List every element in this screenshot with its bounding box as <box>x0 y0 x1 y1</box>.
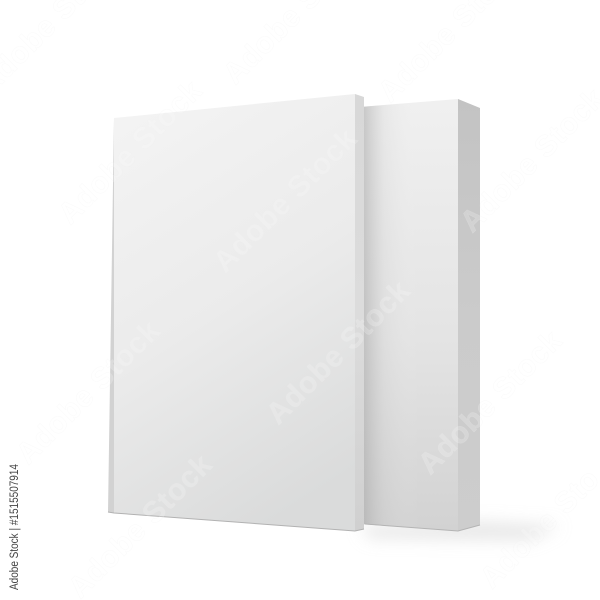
watermark text: Adobe Stock <box>412 324 569 481</box>
floor shadow <box>360 522 560 540</box>
credit line: Adobe Stock | #1515507914 <box>9 463 21 590</box>
back box bottom edge <box>365 524 480 531</box>
front book right side <box>355 94 364 531</box>
back box side <box>458 99 480 531</box>
front book bottom edge <box>108 512 364 531</box>
back box face <box>360 99 458 531</box>
watermark text: Adobe Stock <box>10 314 167 471</box>
watermark text: Adobe Stock <box>207 122 364 279</box>
front book <box>108 94 364 531</box>
front book cover <box>114 94 355 531</box>
back box <box>360 99 480 531</box>
back box cast shadow <box>360 102 420 528</box>
front book spine edge <box>108 118 114 513</box>
watermark text: Adobe Stock <box>52 74 209 231</box>
watermark text: Adobe Stock <box>260 274 417 431</box>
